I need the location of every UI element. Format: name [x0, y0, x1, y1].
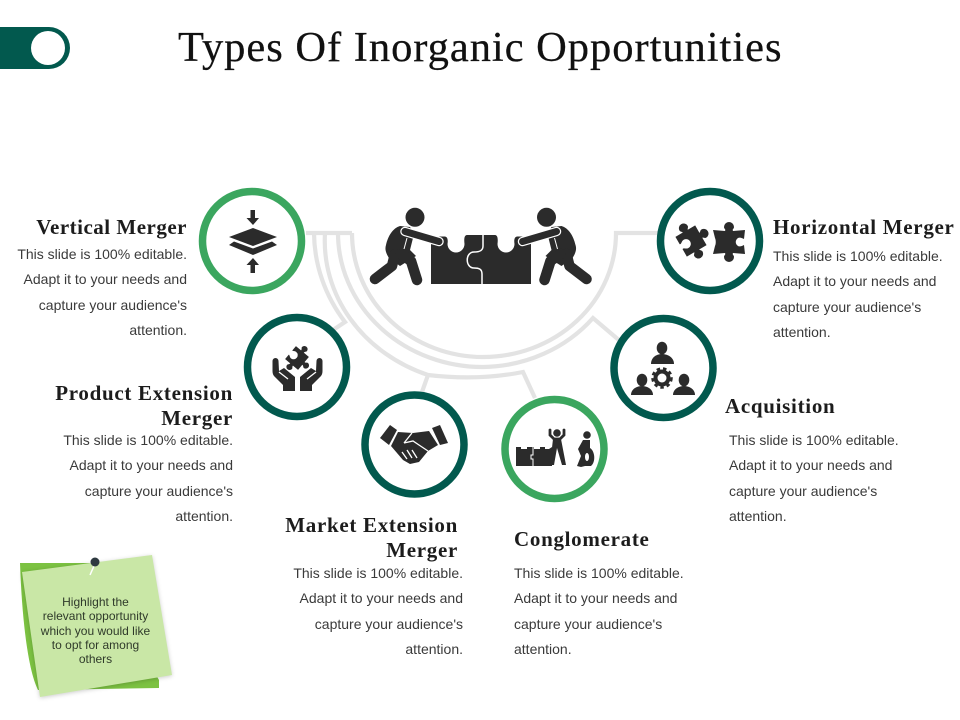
- text: product extension merger: capture your audience's: [85, 483, 233, 499]
- circle: horizontal merger: [660, 192, 760, 290]
- left figure: [375, 208, 439, 280]
- title: Types Of Inorganic Opportunities: [178, 24, 782, 71]
- text: acquisition: Adapt it to your needs and: [729, 457, 892, 473]
- text: acquisition: capture your audience's: [729, 483, 877, 499]
- text: acquisition: This slide is 100% editable.: [729, 432, 899, 448]
- text: product extension merger: [63, 432, 233, 524]
- circle: market extension merger: [365, 395, 464, 494]
- text: horizontal merger: attention.: [773, 324, 831, 340]
- text: product extension merger: This slide is 100% editable.: [63, 432, 233, 448]
- text: conglomerate: attention.: [514, 641, 572, 657]
- puzzle seam: [467, 235, 483, 284]
- text: acquisition: attention.: [729, 508, 787, 524]
- circle: vertical merger: [202, 192, 302, 290]
- text: horizontal merger: This slide is 100% editable.: [773, 248, 943, 264]
- text: horizontal merger: [773, 248, 943, 340]
- icon: two figures pulling puzzle pieces: [375, 208, 586, 284]
- sticky note text: which you would like: [41, 624, 150, 638]
- circle: product extension merger: [248, 318, 346, 416]
- connector arcs: [306, 233, 660, 398]
- text: horizontal merger: capture your audience's: [773, 299, 921, 315]
- sticky note text: Highlight the: [62, 595, 129, 609]
- text: market extension merger: Adapt it to your needs and: [300, 590, 463, 606]
- text: market extension merger: capture your audience's: [315, 616, 463, 632]
- text: vertical merger: [17, 246, 187, 338]
- text: acquisition: [729, 432, 899, 524]
- text: market extension merger: [293, 565, 463, 657]
- heading: conglomerate: Conglomerate: [514, 527, 650, 551]
- sticky note: [20, 555, 172, 697]
- heading: acquisition: Acquisition: [725, 394, 835, 418]
- circle: acquisition: [614, 318, 713, 418]
- icon: jigsaw pieces: [671, 214, 745, 264]
- sticky note text: [40, 595, 150, 666]
- heading: product extension merger: [55, 381, 233, 430]
- text: vertical merger: This slide is 100% editable.: [17, 246, 187, 262]
- icon: team with gear: [631, 342, 695, 395]
- toggle icon: [0, 27, 70, 69]
- right figure: [522, 208, 586, 280]
- heading: product extension merger: Product Extension: [55, 381, 233, 405]
- heading: market extension merger: Market Extension: [285, 513, 458, 537]
- text: conglomerate: [514, 565, 684, 657]
- text: conglomerate: Adapt it to your needs and: [514, 590, 677, 606]
- icon: hands holding puzzle piece: [272, 341, 322, 391]
- sticky note text: relevant opportunity: [43, 609, 148, 623]
- icon: layers merging: [229, 210, 277, 273]
- text: product extension merger: attention.: [175, 508, 233, 524]
- text: conglomerate: This slide is 100% editable.: [514, 565, 684, 581]
- text: conglomerate: capture your audience's: [514, 616, 662, 632]
- text: market extension merger: attention.: [405, 641, 463, 657]
- heading: product extension merger: Merger: [161, 406, 233, 430]
- text: vertical merger: capture your audience's: [39, 297, 187, 313]
- text: vertical merger: Adapt it to your needs and: [24, 271, 187, 287]
- heading: market extension merger: [285, 513, 458, 562]
- heading: vertical merger: Vertical Merger: [36, 215, 187, 239]
- text: vertical merger: attention.: [129, 322, 187, 338]
- icon: puzzle with figures and money bag: [516, 429, 594, 467]
- text: horizontal merger: Adapt it to your needs and: [773, 273, 936, 289]
- text: market extension merger: This slide is 100% editable.: [293, 565, 463, 581]
- icon: handshake: [380, 425, 448, 464]
- heading: horizontal merger: Horizontal Merger: [773, 215, 955, 239]
- puzzle pieces: [431, 235, 531, 284]
- text: product extension merger: Adapt it to your needs and: [70, 457, 233, 473]
- sticky note text: to opt for among: [52, 638, 139, 652]
- circle: conglomerate: [505, 400, 604, 498]
- heading: market extension merger: Merger: [386, 538, 458, 562]
- sticky note text: others: [79, 652, 112, 666]
